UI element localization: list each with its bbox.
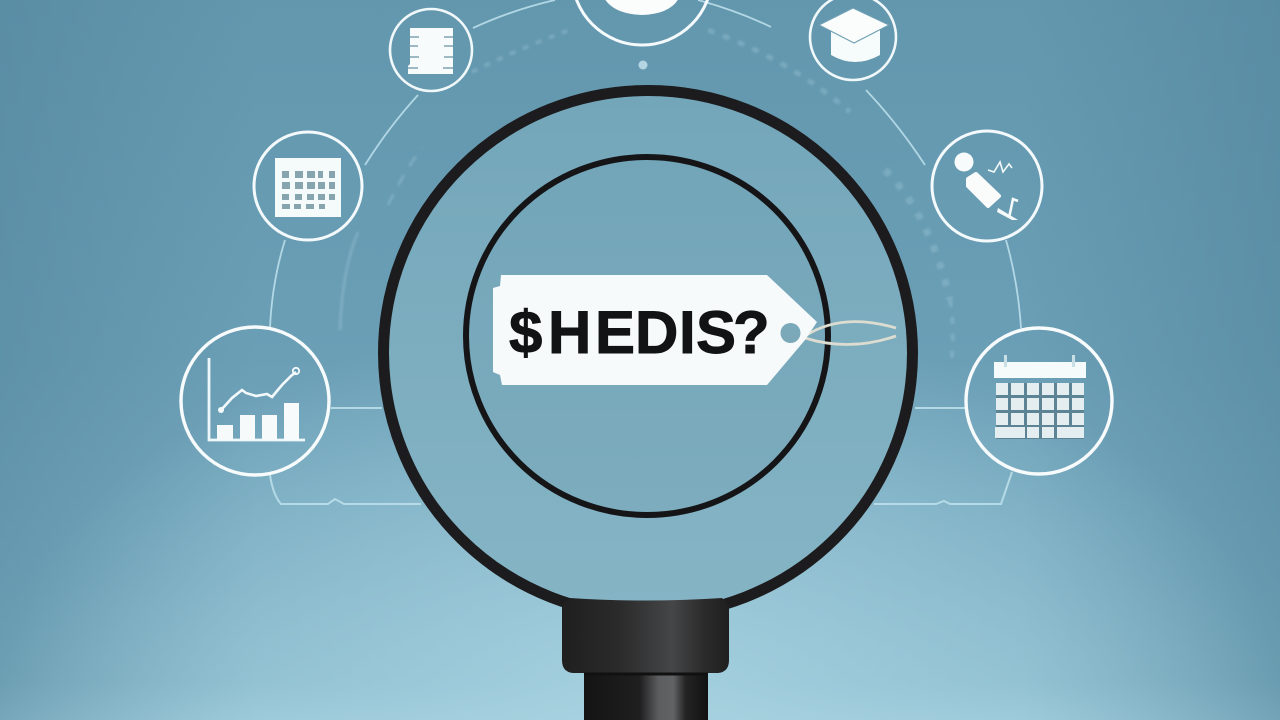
price tag label: $HEDIS?	[509, 299, 770, 366]
icon: bar and line chart	[181, 327, 329, 475]
icon: graduation cap	[810, 0, 896, 80]
icon: top centre badge	[572, 0, 712, 45]
icon: pen and signature	[932, 131, 1042, 241]
center dot	[638, 60, 648, 70]
magnifying glass handle	[562, 598, 729, 720]
icon: small calendar table	[254, 132, 362, 240]
icon: large calendar	[966, 328, 1112, 474]
icon: stacked coins	[390, 9, 472, 91]
price tag	[493, 275, 817, 385]
dotted inner arc	[340, 28, 953, 365]
price tag string	[805, 322, 896, 345]
inner lens ring	[466, 157, 828, 515]
connector lines between icons	[270, 0, 1021, 504]
outer magnifier lens and ring	[384, 90, 912, 616]
